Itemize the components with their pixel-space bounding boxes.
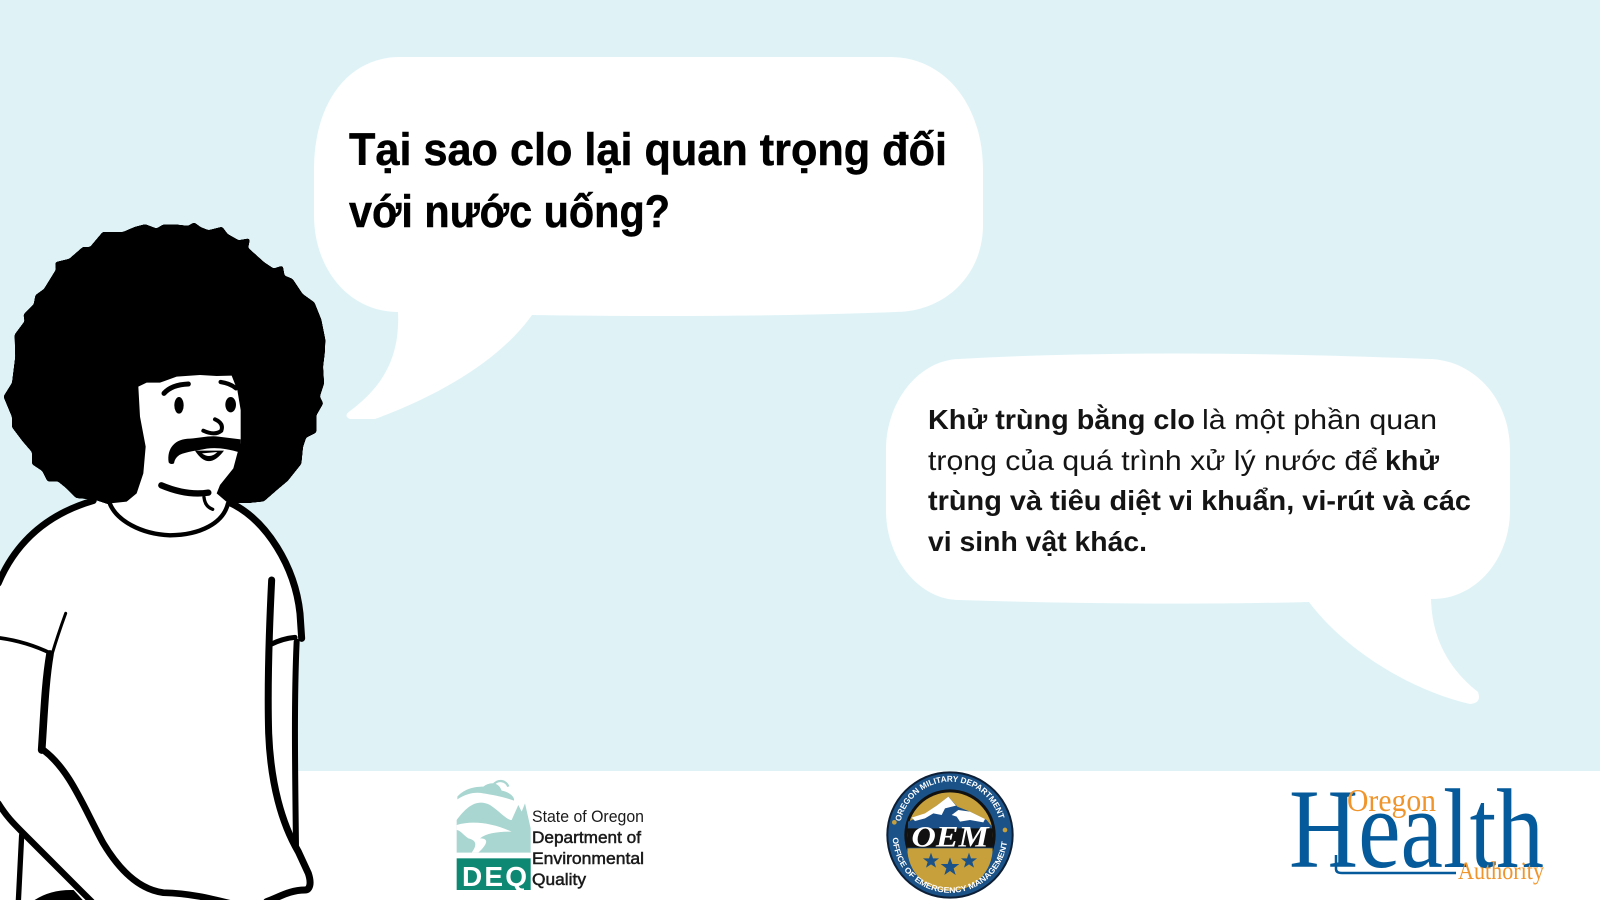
logo: Oregon Office of Emergency Management seal [886,771,1014,899]
answer text: khử [1385,445,1440,476]
speech bubble: answer [886,354,1510,704]
mountain [907,797,993,848]
answer text: trọng của quá trình xử lý nước để [928,445,1378,476]
DEQ name: Department of [532,828,641,847]
answer text [928,404,1471,557]
question heading: với nước uống? [349,186,670,237]
answer text: vi sinh vật khác. [928,526,1147,557]
DEQ letters: DEQ [462,861,527,892]
face [110,375,241,530]
logo: Oregon Health Authority: Health [1289,767,1544,892]
hair and face [5,224,324,535]
DEQ name: Environmental [532,849,644,868]
shirt and arms [0,501,310,900]
logo: Oregon Health Authority: Oregon [1347,782,1436,818]
logo: Oregon Office of Emergency Management seal: OEM [911,822,990,854]
answer text: Khử trùng bằng clo [928,404,1195,435]
logo: Oregon Health Authority: Authority [1458,858,1544,885]
eyebrows, eyes, nose, moustache, mouth [161,382,236,509]
logo: Oregon Office of Emergency Management seal: OFFICE OF EMERGENCY MANAGEMENT [892,838,1007,893]
character: man with afro [0,224,324,900]
answer text: là một phần quan [1202,404,1437,435]
logo: Oregon DEQ [457,781,644,892]
question heading: Tại sao clo lại quan trọng đối [349,124,947,175]
DEQ landscape icon [457,781,531,890]
logo: Oregon Office of Emergency Management seal: OREGON MILITARY DEPARTMENT [896,776,1005,821]
DEQ name [532,807,644,889]
DEQ name: Quality [532,870,586,889]
DEQ name: State of Oregon [532,807,644,826]
answer text: trùng và tiêu diệt vi khuẩn, vi-rút và các [928,485,1471,516]
speech bubble: question [314,57,983,419]
